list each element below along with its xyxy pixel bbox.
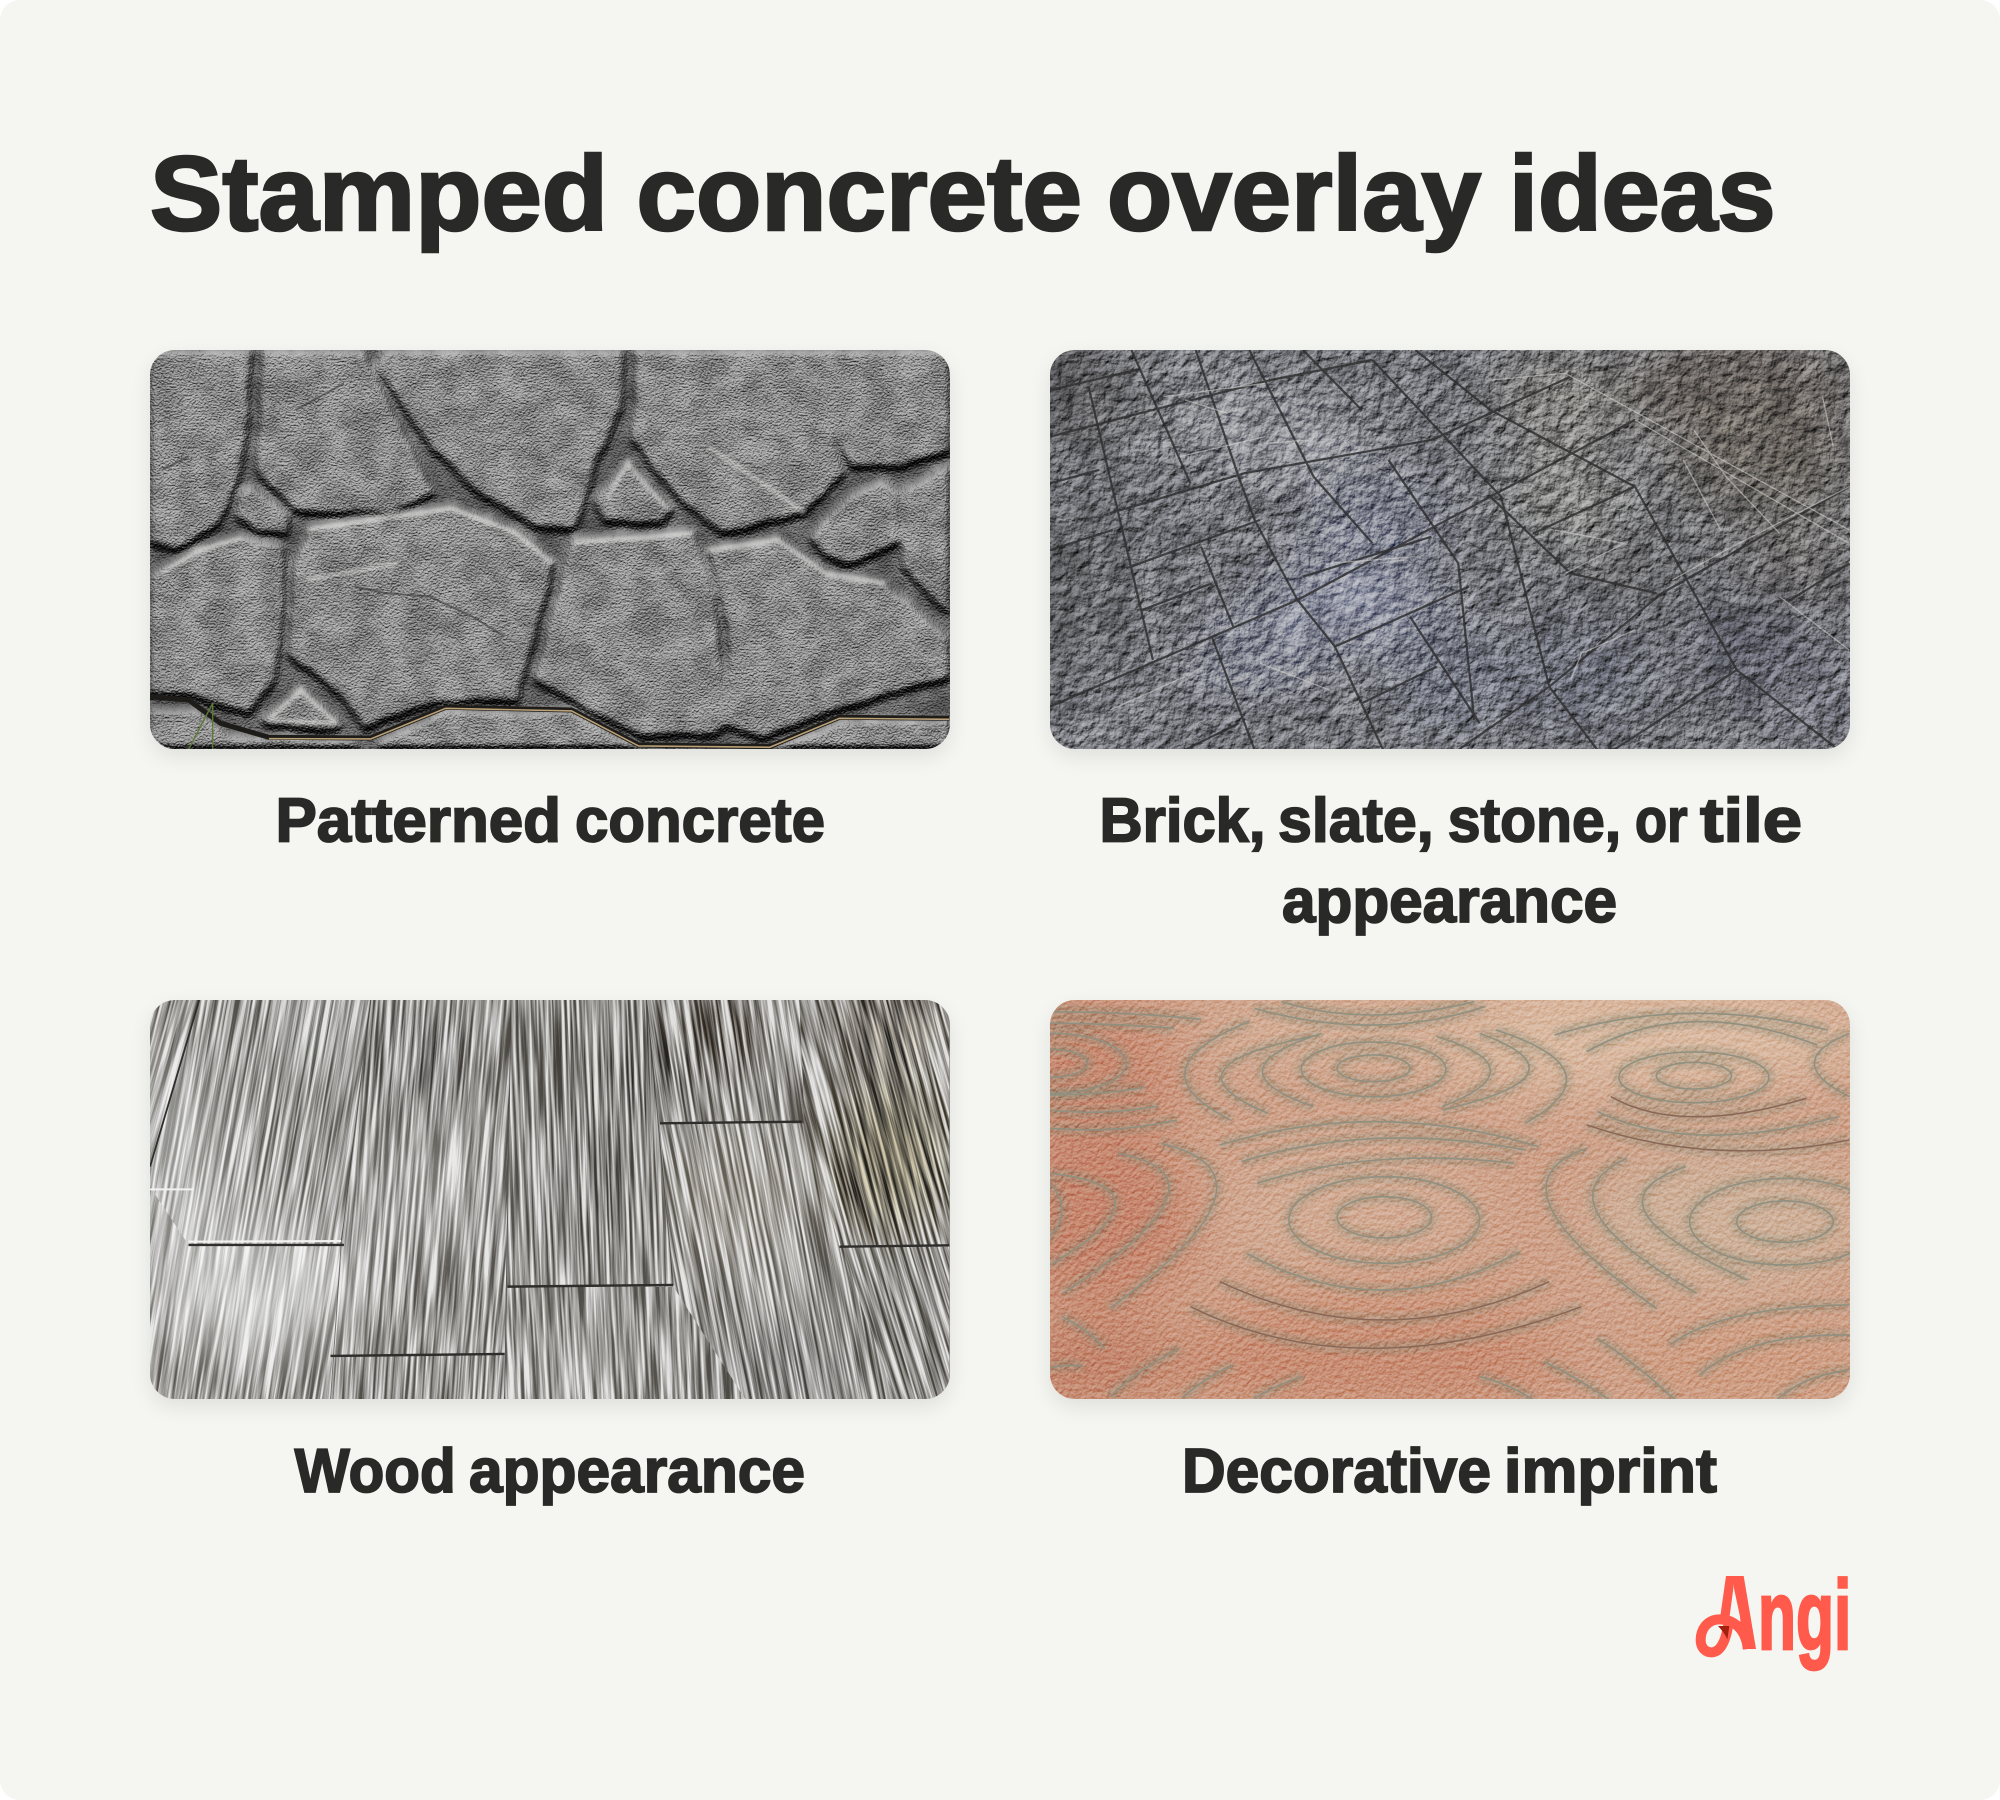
photo: wood plank stamped concrete [150,1000,950,1399]
caption: brick, slate, stone, or tile appearance: Brick, [1100,786,1266,856]
title [150,135,1776,254]
logo: Angi [1696,1560,1851,1672]
title: Stamped [150,135,608,253]
caption: brick, slate, stone, or tile appearance: stone, [1448,786,1621,856]
caption: patterned concrete: concrete [575,786,825,856]
caption: brick, slate, stone, or tile appearance: or [1635,786,1688,856]
caption: wood appearance [294,1437,805,1506]
title: overlay [1107,135,1481,253]
caption: patterned concrete: Patterned [276,786,561,856]
title: concrete [636,135,1082,253]
title: ideas [1509,135,1776,253]
caption: brick, slate, stone, or tile appearance: tile [1700,786,1802,856]
caption: wood appearance: appearance [469,1437,805,1506]
caption: brick, slate, stone, or tile appearance: slate, [1278,786,1434,856]
caption: brick, slate, stone, or tile appearance: appearance [1282,867,1617,936]
photo: decorative circular imprint [1050,1000,1850,1399]
photo: brick and slate stamped paving [1050,350,1850,749]
caption: decorative imprint [1182,1437,1718,1506]
caption: brick, slate, stone, or tile appearance [1100,786,1802,936]
caption: decorative imprint: imprint [1504,1437,1717,1506]
photo: patterned concrete stones [150,350,950,749]
caption: wood appearance: Wood [295,1437,456,1506]
caption: patterned concrete [276,786,825,856]
caption: decorative imprint: Decorative [1182,1437,1491,1506]
